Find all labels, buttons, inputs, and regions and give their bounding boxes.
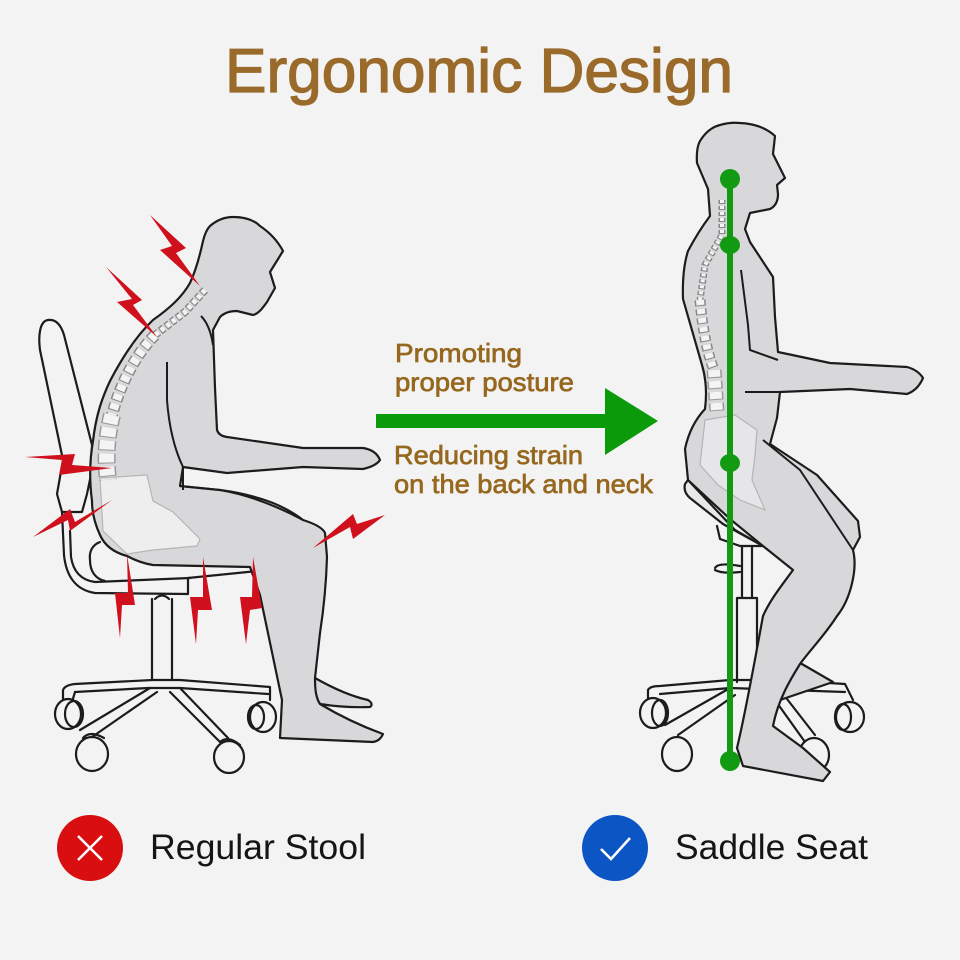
benefit text: promoting proper posture: proper posture (395, 367, 574, 397)
back foot (770, 660, 833, 700)
label: Saddle Seat (675, 828, 868, 867)
arrow: posture improvement (376, 388, 658, 455)
spine (107, 290, 205, 480)
icon: red cross (57, 815, 123, 881)
benefit text: promoting proper posture: Promoting (395, 338, 522, 368)
back foot (290, 670, 372, 707)
body inner lines (741, 270, 853, 550)
chair: saddle seat (640, 480, 864, 772)
label: Regular Stool (150, 828, 366, 867)
benefit text: promoting proper posture (395, 338, 574, 397)
figure: saddle seat with proper posture (640, 123, 923, 781)
body silhouette (90, 217, 383, 742)
pelvis bone (100, 475, 200, 554)
body silhouette (683, 123, 923, 781)
benefit text: reducing strain (394, 440, 654, 499)
pain bolts (25, 215, 385, 644)
spine (700, 200, 722, 412)
alignment line (720, 169, 740, 771)
chair: regular stool (39, 320, 277, 773)
benefit text: reducing strain: on the back and neck (394, 469, 654, 499)
icon: blue check (582, 815, 648, 881)
pelvis bone (700, 415, 765, 510)
title: Ergonomic Design (225, 37, 733, 106)
legend: regular stool (57, 815, 366, 881)
benefit text: reducing strain: Reducing strain (394, 440, 583, 470)
figure: regular stool with poor posture (25, 215, 385, 773)
body inner lines (167, 316, 303, 520)
legend: saddle seat (582, 815, 868, 881)
